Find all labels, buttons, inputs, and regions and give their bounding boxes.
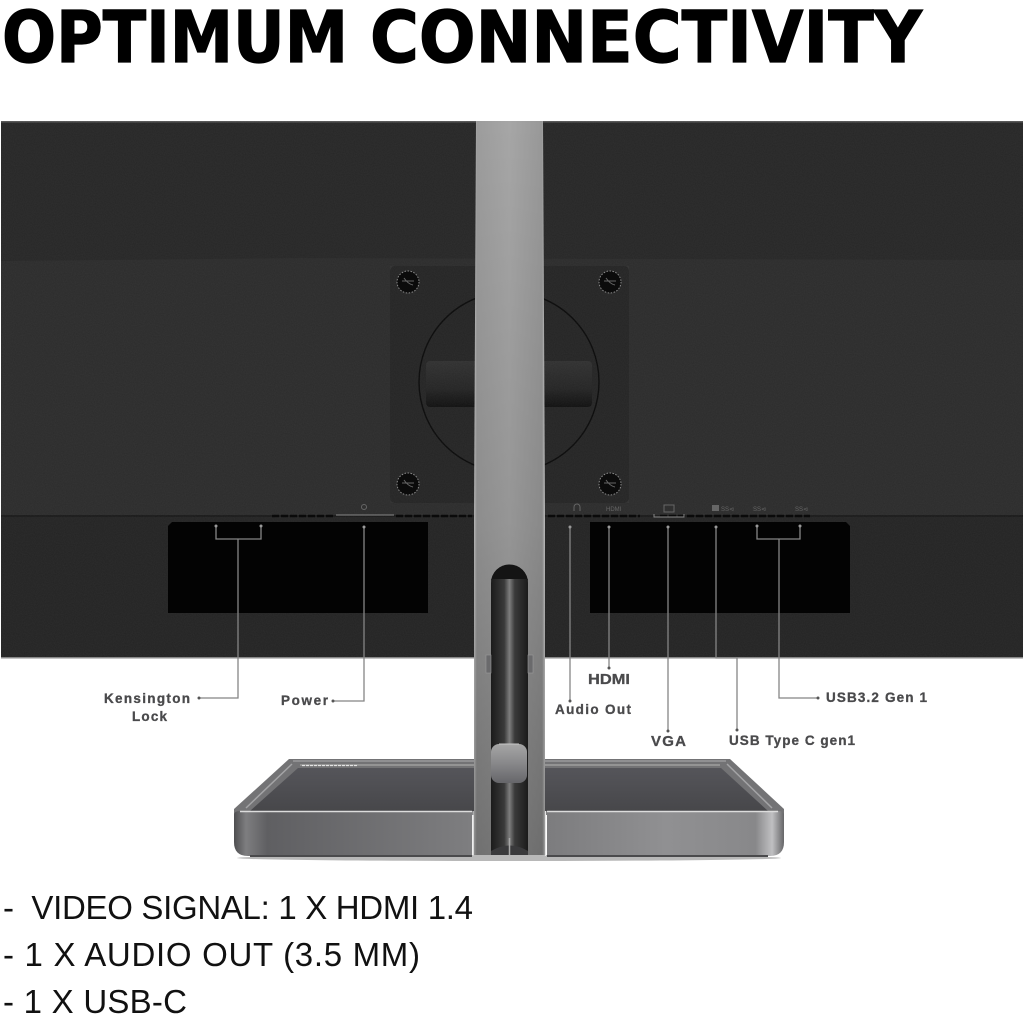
label: Audio Out: Audio Out [555, 702, 632, 717]
base outer rim [234, 759, 784, 815]
callout: Audio Out [568, 526, 572, 702]
base top surface [250, 768, 768, 811]
label: Kensington Lock: Lock [132, 709, 167, 724]
base stand [234, 759, 784, 861]
callout: USB Type C [714, 526, 738, 732]
VESA mount plate [390, 266, 629, 503]
callout: HDMI [608, 526, 610, 670]
icon: screw bottom right [599, 473, 621, 495]
label: VGA: VGA [651, 733, 686, 750]
slot side tabs [486, 655, 491, 673]
label: HDMI: HDMI [588, 672, 630, 688]
base front left [234, 811, 472, 856]
label: USB3.2 Gen 1: USB3.2 Gen 1 [826, 690, 927, 705]
spec: audio out: - 1 X AUDIO OUT (3.5 MM) [3, 936, 420, 973]
label: Kensington Lock: Kensington [104, 691, 190, 706]
callout: Kensington Lock [198, 524, 262, 700]
port markings strip: SS⊲ [795, 507, 808, 513]
mount circle [419, 292, 599, 472]
label: Power: Power [281, 693, 329, 708]
panel: right black port recess [590, 522, 850, 613]
icon: screw bottom left [397, 473, 419, 495]
label: USB Type C gen1: USB Type C gen1 [729, 733, 855, 748]
monitor lower chin [1, 516, 1023, 658]
cable clip [491, 744, 527, 783]
stand body [474, 121, 545, 855]
port markings strip: SS⊲ [753, 507, 766, 513]
monitor upper-mid band [1, 258, 1023, 516]
panel: monitor back [1, 121, 1023, 658]
callout: VGA [666, 526, 670, 732]
callout lines [198, 524, 820, 732]
port markings strip: HDMI [606, 507, 622, 513]
mount arm [426, 361, 592, 407]
base front right [547, 811, 784, 856]
cable slot [491, 564, 528, 853]
icon: screw top right [599, 271, 621, 293]
spec: USB-C: - 1 X USB-C [3, 983, 187, 1020]
port markings strip: SS⊲ [721, 507, 734, 513]
spec list [3, 889, 473, 1020]
icon: screw top left [397, 271, 419, 293]
callout: Power [332, 526, 366, 702]
base shadow [237, 855, 781, 861]
port markings strip [272, 504, 810, 518]
callout: USB3.2 [756, 524, 820, 700]
spec: video signal: - VIDEO SIGNAL: 1 X HDMI 1.4 [3, 889, 473, 926]
panel: left black port recess [168, 522, 428, 613]
stand column [473, 121, 546, 856]
